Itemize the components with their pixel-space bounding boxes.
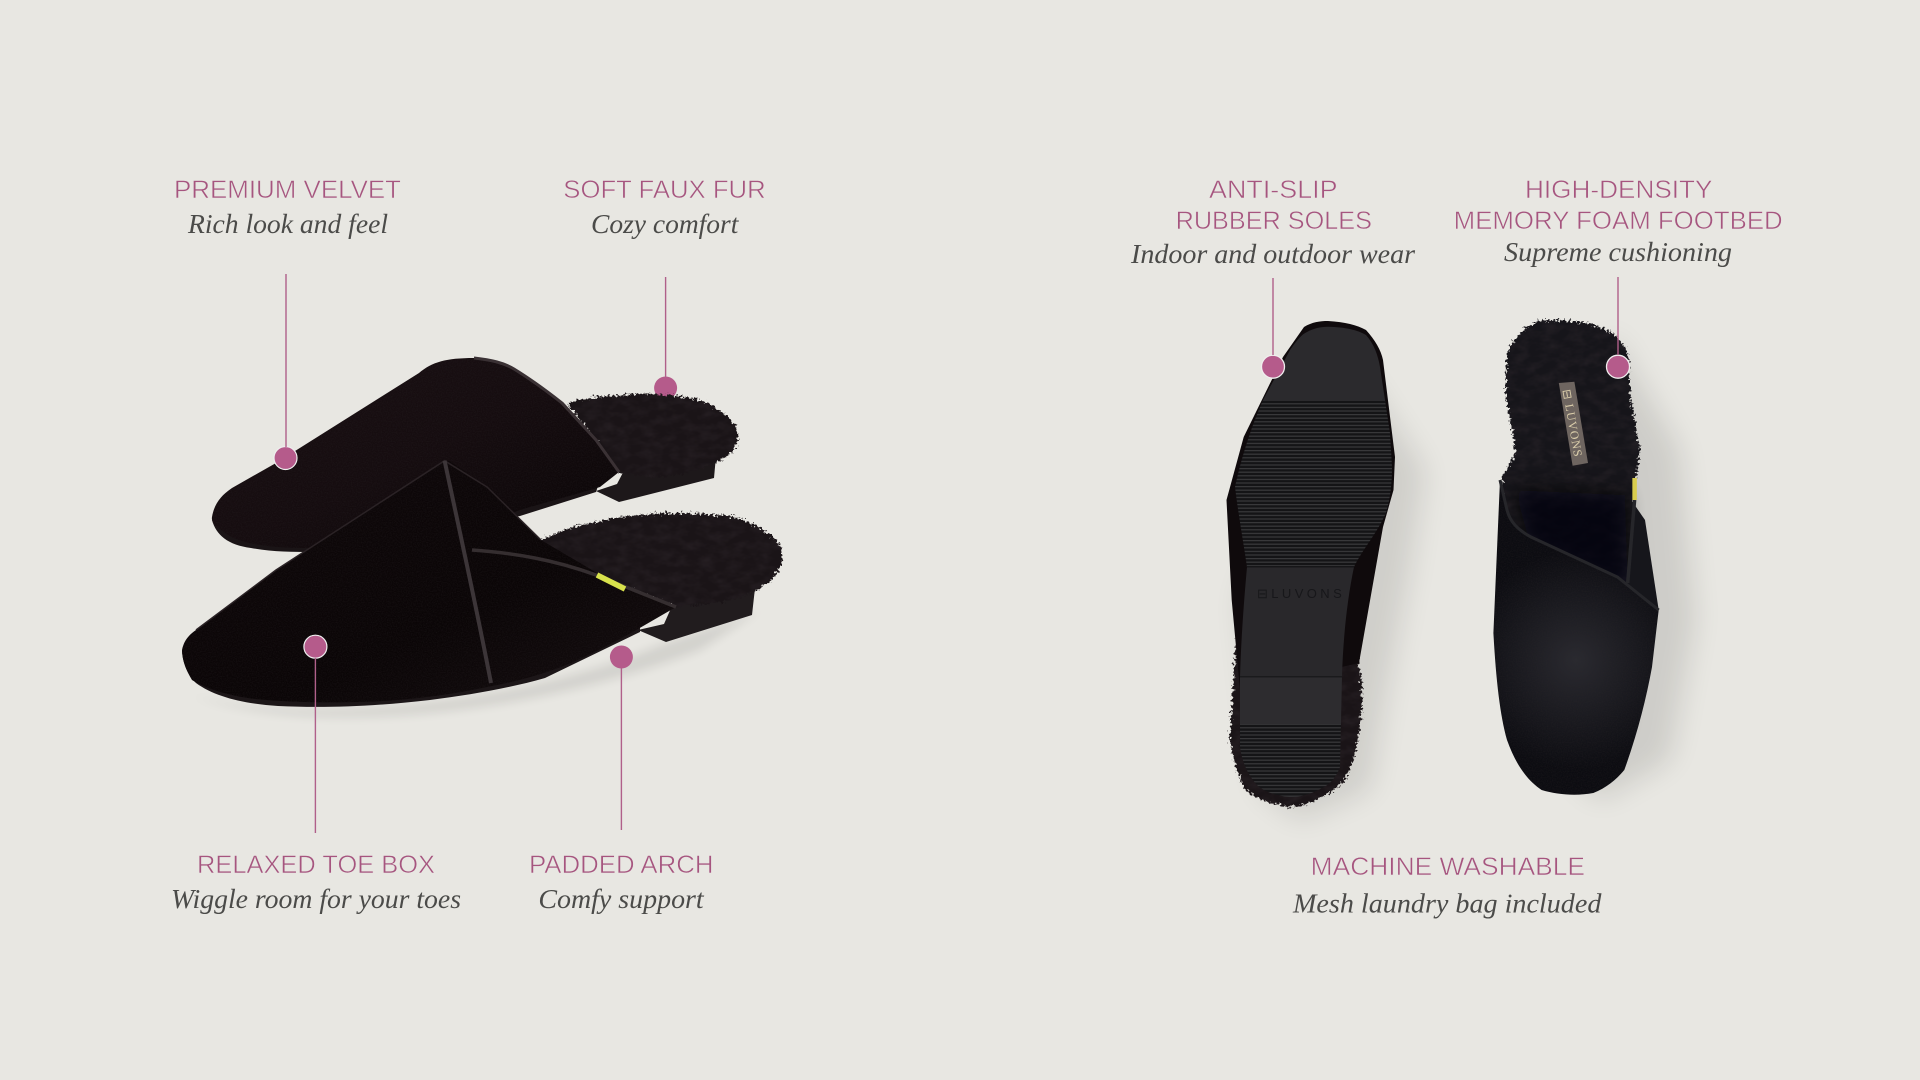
front mule	[182, 461, 782, 707]
text: high-density memory foam footbed: Supreme cushioning	[1504, 237, 1732, 267]
brand label: ⊟ LUVONS	[1560, 388, 1585, 457]
leader line: padded arch	[620, 668, 622, 830]
text: soft faux fur	[563, 176, 766, 239]
right side quarter	[1625, 505, 1659, 610]
text: padded arch: PADDED ARCH	[529, 851, 714, 879]
text: anti-slip rubber soles: RUBBER SOLES	[1176, 207, 1372, 235]
text: padded arch	[529, 851, 714, 914]
callout dot: padded arch	[610, 646, 633, 668]
shadow under side view mules	[190, 610, 760, 717]
panel: top view mule	[1493, 320, 1695, 800]
yellow loop tag	[1632, 478, 1637, 500]
leader line: memory foam	[1617, 277, 1619, 355]
text: machine washable: Mesh laundry bag included	[1292, 889, 1602, 919]
text: relaxed toe box: RELAXED TOE BOX	[197, 851, 435, 879]
leader line: soft faux fur	[665, 277, 667, 377]
text: high-density memory foam footbed	[1454, 176, 1783, 267]
text: premium velvet: PREMIUM VELVET	[174, 176, 401, 204]
panel: sole view mule	[1225, 320, 1425, 820]
brand mark on sole: ⊟LUVONS	[1257, 586, 1345, 601]
back mule	[212, 358, 738, 556]
text: high-density memory foam footbed: MEMORY FOAM FOOTBED	[1454, 207, 1783, 235]
text: padded arch: Comfy support	[538, 884, 705, 914]
callout dot: premium velvet	[274, 446, 297, 470]
fur heel	[1230, 640, 1362, 807]
text: high-density memory foam footbed: HIGH-DENSITY	[1525, 176, 1713, 204]
leader line: anti-slip soles	[1272, 278, 1274, 355]
rubber sole	[1235, 326, 1392, 797]
shadow of sole view mule	[1240, 340, 1425, 820]
panel: side view mules	[182, 358, 782, 717]
text: premium velvet: Rich look and feel	[187, 209, 388, 239]
text: relaxed toe box: Wiggle room for your toes	[171, 884, 461, 914]
text: premium velvet	[174, 176, 401, 239]
callout dot: anti-slip rubber soles	[1262, 355, 1284, 378]
shadow of top view mule	[1560, 330, 1695, 800]
text: anti-slip rubber soles: ANTI-SLIP	[1209, 176, 1338, 204]
yellow loop tag	[597, 575, 625, 589]
callout dot: memory foam footbed	[1606, 355, 1630, 378]
text: anti-slip rubber soles	[1130, 176, 1416, 269]
fur footbed	[1502, 320, 1640, 590]
leader line: relaxed toe box	[314, 658, 316, 833]
text: soft faux fur: Cozy comfort	[591, 209, 740, 239]
leader line: premium velvet	[285, 274, 287, 447]
callout dot: soft faux fur	[654, 376, 677, 400]
callout dot: relaxed toe box	[304, 635, 327, 658]
text: machine washable: MACHINE WASHABLE	[1311, 853, 1585, 881]
velvet vamp	[1493, 480, 1659, 795]
text: soft faux fur: SOFT FAUX FUR	[563, 176, 766, 204]
text: machine washable	[1292, 853, 1602, 919]
inner shadow of footbed	[1515, 490, 1628, 590]
velvet upper seen from below	[1226, 321, 1395, 690]
text: anti-slip rubber soles: Indoor and outdoor wear	[1130, 239, 1416, 269]
text: relaxed toe box	[171, 851, 461, 914]
